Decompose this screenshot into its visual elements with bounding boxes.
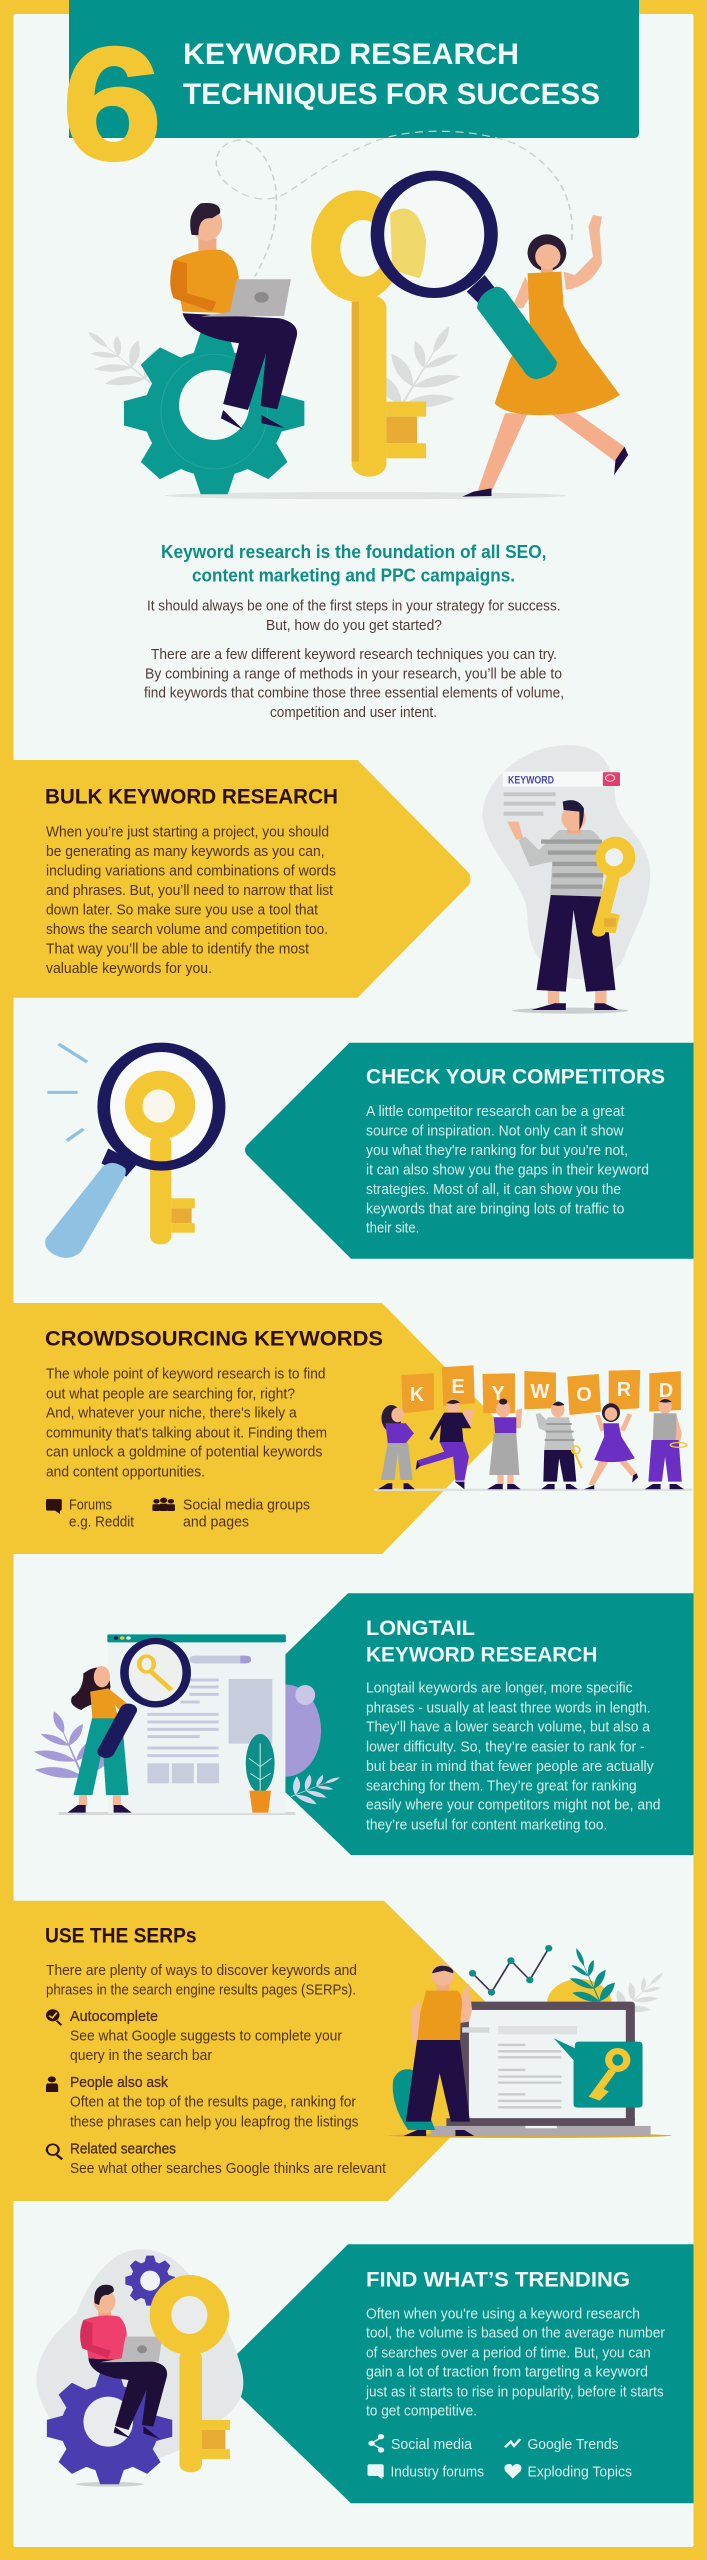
figure: woman in orange dress xyxy=(462,215,628,497)
body text: crowdsourcing keywords xyxy=(46,1367,327,1480)
laptop xyxy=(388,2002,672,2138)
body text: check your competitors: it can also show you the gaps in their keyword xyxy=(366,1162,649,1178)
heading: bulk keyword research: BULK KEYWORD RESEARCH xyxy=(45,786,338,808)
header banner xyxy=(62,0,639,193)
body text: find what's trending: tool, the volume is based on the average number xyxy=(366,2326,665,2342)
icon: trend xyxy=(505,2439,520,2447)
body text: longtail keyword research: lower difficulty. So, they’re easier to rank for - xyxy=(366,1739,645,1755)
illustration: man on purple gear with key xyxy=(36,2249,243,2487)
title: KEYWORD RESEARCH xyxy=(183,38,519,71)
panel: crowdsourcing keywords xyxy=(14,1303,505,1554)
body text: crowdsourcing keywords: community that's talking about it. Finding them xyxy=(46,1425,327,1441)
icon: yellow key xyxy=(150,2275,230,2472)
panel: bulk keyword research xyxy=(14,760,470,998)
letters on cards: E xyxy=(451,1376,465,1398)
letters on cards: K xyxy=(410,1384,425,1406)
intro text: serps: There are plenty of ways to discover keywords and xyxy=(46,1963,357,1979)
person six xyxy=(645,1398,687,1489)
heading: longtail keyword research xyxy=(366,1617,597,1667)
page backdrop circle xyxy=(252,1685,321,1777)
intro text: serps xyxy=(46,1963,357,1998)
potted plant xyxy=(246,1734,275,1813)
intro heading: Keyword research is the foundation of all SEO, xyxy=(161,541,546,562)
body text: bulk keyword research: That way you’ll be able to identify the most xyxy=(46,942,309,958)
woman xyxy=(68,1666,132,1813)
icon: purple gear xyxy=(47,2372,172,2484)
list item: forums: Forums xyxy=(69,1497,112,1513)
person three xyxy=(487,1399,522,1489)
intro heading: content marketing and PPC campaigns. xyxy=(192,565,515,586)
body text: check your competitors xyxy=(366,1104,649,1237)
body text: find what's trending xyxy=(365,2306,665,2420)
body text: bulk keyword research: and phrases. But, you’ll need to narrow that list xyxy=(46,883,333,899)
body text: longtail keyword research: Longtail keywords are longer, more specific xyxy=(366,1681,633,1697)
heading: crowdsourcing keywords: CROWDSOURCING KEYWORDS xyxy=(45,1328,383,1351)
list item: people also ask: these phrases can help you leapfrog the listings xyxy=(70,2114,358,2130)
body text: longtail keyword research: easily where your competitors might not be, and xyxy=(366,1798,660,1814)
list item: related searches: Related searches xyxy=(70,2141,176,2157)
list item: people also ask: Often at the top of the results page, ranking for xyxy=(70,2095,356,2111)
illustration: man with laptop and chart xyxy=(388,1943,680,2138)
letters on cards: W xyxy=(531,1381,550,1403)
body text: find what's trending: to get competitive. xyxy=(366,2404,477,2420)
person four xyxy=(536,1401,582,1489)
icon: search xyxy=(47,2144,62,2159)
body text: crowdsourcing keywords: can unlock a goldmine of potential keywords xyxy=(46,1445,322,1461)
body text: bulk keyword research: shows the search volume and competition too. xyxy=(46,922,328,938)
heading: find what's trending: FIND WHAT’S TRENDING xyxy=(366,2269,630,2292)
list item: people also ask xyxy=(70,2075,358,2130)
body text: bulk keyword research xyxy=(46,825,336,977)
letters on cards: D xyxy=(659,1380,673,1402)
body text: find what's trending: of searches over a period of time. But, you can xyxy=(366,2345,651,2361)
list item: social media: Social media xyxy=(391,2437,473,2453)
list item: autocomplete: See what Google suggests to complete your xyxy=(70,2029,342,2045)
intro heading xyxy=(161,541,546,586)
list item: autocomplete: Autocomplete xyxy=(70,2009,158,2025)
body text: find what's trending: Often when you're using a keyword research xyxy=(366,2306,640,2322)
illustration: man with key and search bar xyxy=(482,745,650,1014)
illustration: people holding keyword letters xyxy=(374,1365,692,1491)
icon: yellow key xyxy=(311,190,426,477)
intro paragraph: find keywords that combine those three essential elements of volume, xyxy=(144,686,564,702)
list item: exploding topics: Exploding Topics xyxy=(528,2465,632,2481)
person one xyxy=(378,1405,415,1489)
illustration: magnifier over key xyxy=(45,1044,219,1258)
intro text xyxy=(144,541,564,721)
heading: use the serps: USE THE SERPs xyxy=(45,1925,197,1948)
intro paragraph: But, how do you get started? xyxy=(266,618,442,634)
body text: longtail keyword research: they’re useful for content marketing too. xyxy=(366,1817,607,1833)
body text: crowdsourcing keywords: And, whatever your niche, there's likely a xyxy=(46,1406,297,1422)
speech box with key xyxy=(554,2038,643,2108)
man standing xyxy=(393,1964,474,2136)
trend line chart xyxy=(469,1945,552,1996)
body text: longtail keyword research: phrases - usually at least three words in length. xyxy=(366,1700,651,1716)
list item: related searches: See what other searches Google thinks are relevant xyxy=(70,2161,386,2177)
body text: longtail keyword research: searching for them. They’re great for ranking xyxy=(366,1778,637,1794)
body text: find what's trending: gain a lot of traction from targeting a keyword xyxy=(366,2365,648,2381)
body text: longtail keyword research xyxy=(366,1681,660,1833)
body text: bulk keyword research: valuable keywords for you. xyxy=(46,961,212,977)
icon: heart xyxy=(504,2464,521,2479)
icon: teal gear xyxy=(124,332,304,494)
icon: person xyxy=(46,2076,58,2092)
body text: crowdsourcing keywords: The whole point of keyword research is to find xyxy=(46,1367,326,1383)
list item: google trends: Google Trends xyxy=(528,2437,618,2453)
list item: autocomplete: query in the search bar xyxy=(70,2048,212,2064)
search keyword label: KEYWORD xyxy=(508,774,554,786)
intro paragraph xyxy=(144,599,564,721)
intro paragraph: By combining a range of methods in your research, you’ll be able to xyxy=(145,666,562,682)
icon: social group xyxy=(152,1498,175,1511)
heading: check your competitors: CHECK YOUR COMPETITORS xyxy=(366,1065,665,1088)
list item: related searches xyxy=(70,2141,386,2177)
figure: man in pink shirt xyxy=(80,2285,167,2439)
letters on cards: Y xyxy=(491,1383,505,1405)
body text: check your competitors: keywords that are bringing lots of traffic to xyxy=(366,1201,624,1217)
letters on cards: O xyxy=(576,1384,592,1406)
list item: social media groups xyxy=(183,1497,310,1530)
browser window xyxy=(107,1634,286,1813)
intro paragraph: competition and user intent. xyxy=(270,705,437,721)
intro text: serps: phrases in the search engine results pages (SERPs). xyxy=(46,1982,356,1998)
list item: people also ask: People also ask xyxy=(70,2075,169,2091)
title: TECHNIQUES FOR SUCCESS xyxy=(183,78,600,111)
title xyxy=(183,38,600,111)
intro paragraph: It should always be one of the first steps in your strategy for success. xyxy=(147,599,560,615)
letters on cards: R xyxy=(617,1379,632,1401)
list item: social media groups: and pages xyxy=(183,1514,249,1530)
letter cards xyxy=(401,1365,681,1415)
icon: autocomplete xyxy=(46,2009,61,2025)
icon: small gear xyxy=(125,2256,175,2306)
body text: check your competitors: A little competitor research can be a great xyxy=(366,1104,624,1120)
body text: bulk keyword research: down later. So make sure you use a tool that xyxy=(46,903,318,919)
body text: longtail keyword research: but bear in mind that fewer people are actually xyxy=(366,1759,654,1775)
icon: chat xyxy=(367,2464,384,2479)
big number six: 6 xyxy=(62,14,162,193)
body text: bulk keyword research: be generating as many keywords as you can, xyxy=(46,844,325,860)
magnifier with key xyxy=(106,1641,187,1752)
body text: check your competitors: you what they're ranking for but you're not, xyxy=(366,1143,628,1159)
hero illustration xyxy=(62,131,628,499)
list item: social media groups: Social media groups xyxy=(183,1497,310,1513)
panel: check your competitors xyxy=(245,1043,694,1259)
panel: find what's trending xyxy=(217,2244,694,2503)
panel: use the serps xyxy=(14,1901,535,2201)
heading: longtail keyword research: LONGTAIL xyxy=(366,1617,475,1640)
body text: crowdsourcing keywords: out what people are searching for, right? xyxy=(46,1386,295,1402)
list item: forums xyxy=(69,1497,134,1530)
icon: forum chat xyxy=(46,1499,62,1514)
icon: share xyxy=(368,2434,384,2453)
person two xyxy=(416,1399,473,1489)
intro paragraph: There are a few different keyword research techniques you can try. xyxy=(151,647,557,663)
body text: bulk keyword research: including variations and combinations of words xyxy=(46,864,336,880)
list item: forums: e.g. Reddit xyxy=(69,1514,134,1530)
panel: longtail keyword research xyxy=(214,1593,694,1855)
list item: autocomplete xyxy=(70,2009,342,2064)
body text: check your competitors: strategies. Most of all, it can show you the xyxy=(366,1182,621,1198)
figure: man with laptop xyxy=(170,203,297,430)
heading: longtail keyword research: KEYWORD RESEARCH xyxy=(366,1644,597,1667)
person five xyxy=(584,1403,638,1489)
body text: check your competitors: source of inspiration. Not only can it show xyxy=(366,1123,624,1139)
body text: bulk keyword research: When you’re just starting a project, you should xyxy=(46,825,329,841)
list item: industry forums: Industry forums xyxy=(390,2465,484,2481)
illustration: woman inspecting web page xyxy=(13,1634,350,1815)
body text: longtail keyword research: They’ll have a lower search volume, but also a xyxy=(366,1720,651,1736)
icon: magnifying glass xyxy=(377,176,557,379)
body text: crowdsourcing keywords: and content opportunities. xyxy=(46,1464,205,1480)
letters on cards xyxy=(410,1376,673,1406)
body text: find what's trending: just as it starts to rise in popularity, before it starts xyxy=(365,2384,664,2400)
body text: check your competitors: their site. xyxy=(366,1221,419,1237)
